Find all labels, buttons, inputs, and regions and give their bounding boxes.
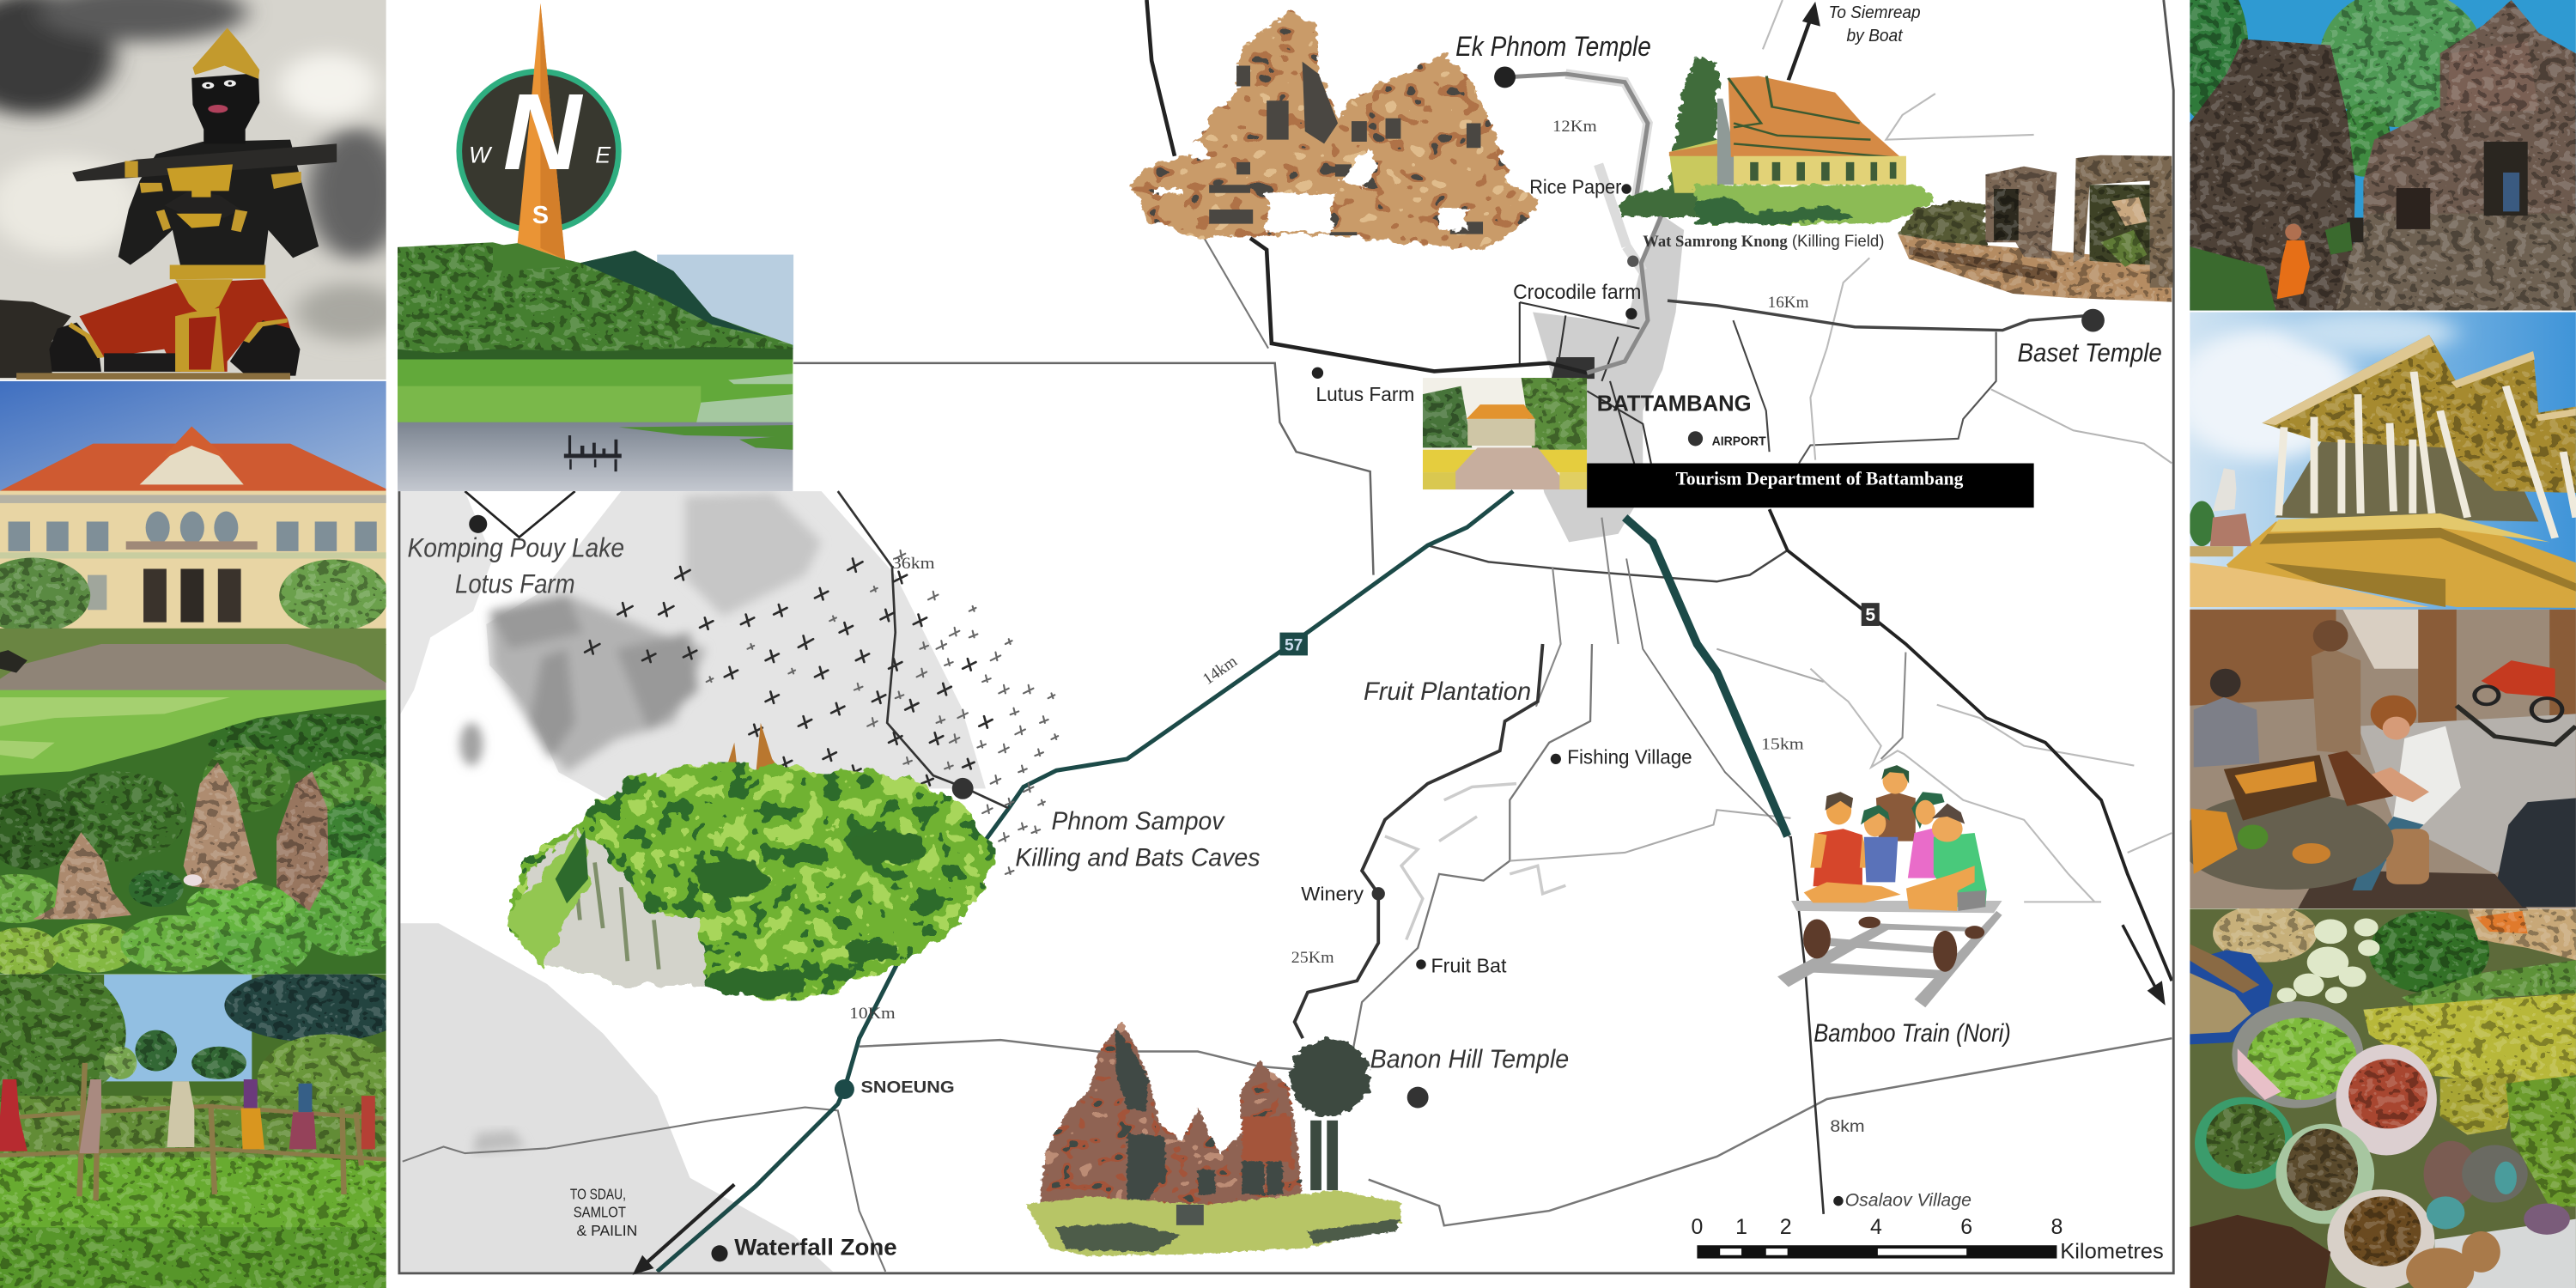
scale bar: 8 [2050,1215,2063,1239]
pedestal [16,373,290,380]
illustration: Baset temple ruins [1898,155,2172,302]
map labels: Lutus Farm [1316,383,1414,405]
stupa [1717,99,1742,185]
compass [459,3,618,259]
road badge 57: 57 [1285,637,1303,655]
map labels: 25Km [1291,949,1334,967]
tree [1291,1038,1369,1116]
map labels: Waterfall Zone [734,1235,897,1261]
map labels: 10Km [849,1005,896,1023]
crown [192,28,259,79]
arrow: to Sdau [633,1184,734,1275]
arms and torso [118,140,319,267]
cabbages [2277,919,2380,1004]
compass: E [595,142,611,167]
photo: provincial hall [0,380,389,690]
towers [33,762,329,919]
compass: S [532,202,549,229]
facade [0,491,386,644]
table [2180,793,2393,890]
bird flock [585,550,1058,887]
road badge 5 [1862,603,1880,626]
north road [1146,0,1587,373]
scale bar: 6 [1960,1215,1972,1239]
wheels [1803,919,1831,958]
map labels: TO SDAU, [570,1186,626,1203]
grass [1026,1190,1400,1256]
brown sack [2275,1124,2374,1224]
map labels: Ek Phnom Temple [1455,31,1651,62]
map labels: Baset Temple [2017,338,2162,368]
photo: market stall [2180,607,2576,911]
photo: bridge walkers [0,964,410,1288]
map labels: 15km [1761,735,1804,753]
mountain [397,242,793,361]
compass needle [518,3,565,259]
interior [2275,435,2538,521]
map labels: by Boat [1847,27,1904,46]
map labels: Phnom Sampov [1051,807,1225,835]
monk [2277,240,2310,299]
tree [1619,56,1717,218]
grass [1695,185,1936,224]
scale bar: Kilometres [2060,1240,2164,1264]
legs [79,279,290,372]
map labels: 14km [1200,653,1241,689]
road from Phnom Sampov [838,491,1009,808]
map labels: 16Km [1768,294,1809,312]
road 57 teal [657,491,1513,1272]
map labels: SNOEUNG [861,1078,955,1097]
person back [1876,792,1916,841]
scale bar [1691,1215,2164,1264]
road badge 5: 5 [1865,605,1875,625]
temple body [1130,9,1540,251]
columns [2279,372,2576,538]
map labels: Winery [1301,883,1364,904]
map labels: Rice Paper [1529,176,1622,198]
coconuts [2406,1248,2474,1288]
thin roads [403,0,2172,1272]
motorbike [2482,660,2555,697]
map labels: To Siemreap [1828,3,1921,22]
sword [72,143,337,181]
black title bar: Tourism Department of Battambang [1676,467,1963,489]
temple on hilltop [726,723,782,775]
map labels: & PAILIN [577,1222,637,1239]
bowl [167,164,233,191]
black title bar [1587,464,2034,507]
Fruit plantation road [1295,644,1543,1038]
roof [0,444,386,493]
walkers [0,1079,375,1153]
portico [143,568,167,623]
platform [1791,901,2002,913]
dark foliage [695,828,927,995]
location dots [469,66,2105,1261]
gray road to Ek Phnom [1505,74,1661,373]
temple gaps [1154,140,1467,232]
fruit crates [2224,755,2330,821]
fence [0,1063,386,1200]
illustration: Ek Phnom temple [1130,9,1540,251]
map labels: Fishing Village [1567,746,1692,769]
pagoda roof [2262,335,2576,493]
compass: W [469,142,493,167]
arrow: to Siemreap [1802,2,1820,27]
map labels: SAMLOT [574,1204,626,1221]
photo: Wat Ek Phnom ruins [2172,0,2576,311]
ground [2190,562,2429,607]
belt [170,265,265,279]
illustration: Wat Samrong Knong pagoda [1619,10,1936,224]
gray road halo [1565,74,1648,271]
map labels: Osalaov Village [1845,1190,1971,1210]
base [2227,513,2576,608]
railway thin [1790,836,1824,1214]
photo: warrior statue [0,0,405,380]
tree [0,300,71,378]
hill foliage [509,762,995,1000]
trees [0,558,389,634]
map labels: 36km [892,555,935,573]
clouds [0,0,405,341]
statue [2213,468,2236,512]
backpack [2498,798,2576,907]
Komping lines [465,491,575,538]
map labels: Komping Pouy Lake [407,532,624,563]
person pink [1908,827,1941,878]
towers [1040,1022,1303,1211]
scale bar: 4 [1870,1215,1882,1239]
map labels: Killing and Bats Caves [1015,843,1261,872]
map labels: Crocodile farm [1513,281,1641,304]
scale bar: 1 [1735,1215,1747,1239]
illustration: Banon Hill temple [1026,1022,1400,1256]
map labels [407,3,2162,1261]
hands [164,191,241,218]
city street grid [1520,302,1651,493]
forest [0,714,386,975]
person blue [1864,837,1898,882]
windows [9,512,377,551]
water [397,422,793,491]
tan sack [2327,1189,2434,1288]
metal bowl [2232,1001,2363,1108]
map labels: AIRPORT [1712,434,1766,448]
map labels: 8km [1830,1118,1865,1136]
green bowl [2195,1097,2293,1189]
lake photo [397,242,794,491]
photo: golden pagoda [2172,313,2576,610]
bags [2424,1141,2570,1235]
map labels: Banon Hill Temple [1370,1045,1569,1074]
map labels: BATTAMBANG [1597,392,1752,416]
photo: Banon temple from hill [0,690,386,975]
compass: N [503,71,584,192]
scale bar: 2 [1780,1215,1792,1239]
small photo: Tourism Department building [1423,378,1587,489]
road badge 57 [1279,633,1308,655]
road [0,644,386,690]
gray cliff [513,829,710,986]
map labels: Fruit Bat [1431,955,1507,977]
railway teal thick [1625,518,1788,836]
Baset road [1668,301,2090,331]
person red [1814,829,1862,886]
terrain shading [399,491,986,1272]
illustration: bamboo train family [1777,765,2002,1007]
temple dark details [1209,62,1483,235]
road 5 [1770,509,2172,981]
field [397,360,793,425]
girl [2393,726,2461,824]
roof [1728,76,1906,162]
blue basket [2190,950,2273,1044]
map labels: Bamboo Train (Nori) [1814,1019,2011,1048]
map labels: Lotus Farm [455,568,575,599]
road 5 arrow [2123,925,2166,1005]
people [2194,697,2259,767]
photo: vegetable market [2190,905,2576,1288]
person green [1934,833,1987,907]
boat [564,435,622,471]
illustration: Phnom Sampov mountain [509,723,995,1000]
dried goods [2190,1215,2330,1288]
rails and frame [1777,911,2002,1007]
scale bar: 0 [1691,1215,1703,1239]
ground [2434,1219,2576,1288]
chili sack [2336,1044,2437,1156]
city area [1520,214,1684,542]
wall [1734,156,1906,185]
map labels: 12Km [1552,118,1597,136]
bushes [2190,222,2353,311]
map panel [399,0,2173,1273]
arrow to Siemreap [1789,10,1814,80]
sky [657,255,794,349]
head [191,73,259,143]
lake mountain overlap on needle [493,243,575,271]
frame [399,0,2173,1273]
map labels: Wat Samrong Knong (Killing Field) [1643,233,1885,251]
map labels: Fruit Plantation [1364,677,1531,706]
